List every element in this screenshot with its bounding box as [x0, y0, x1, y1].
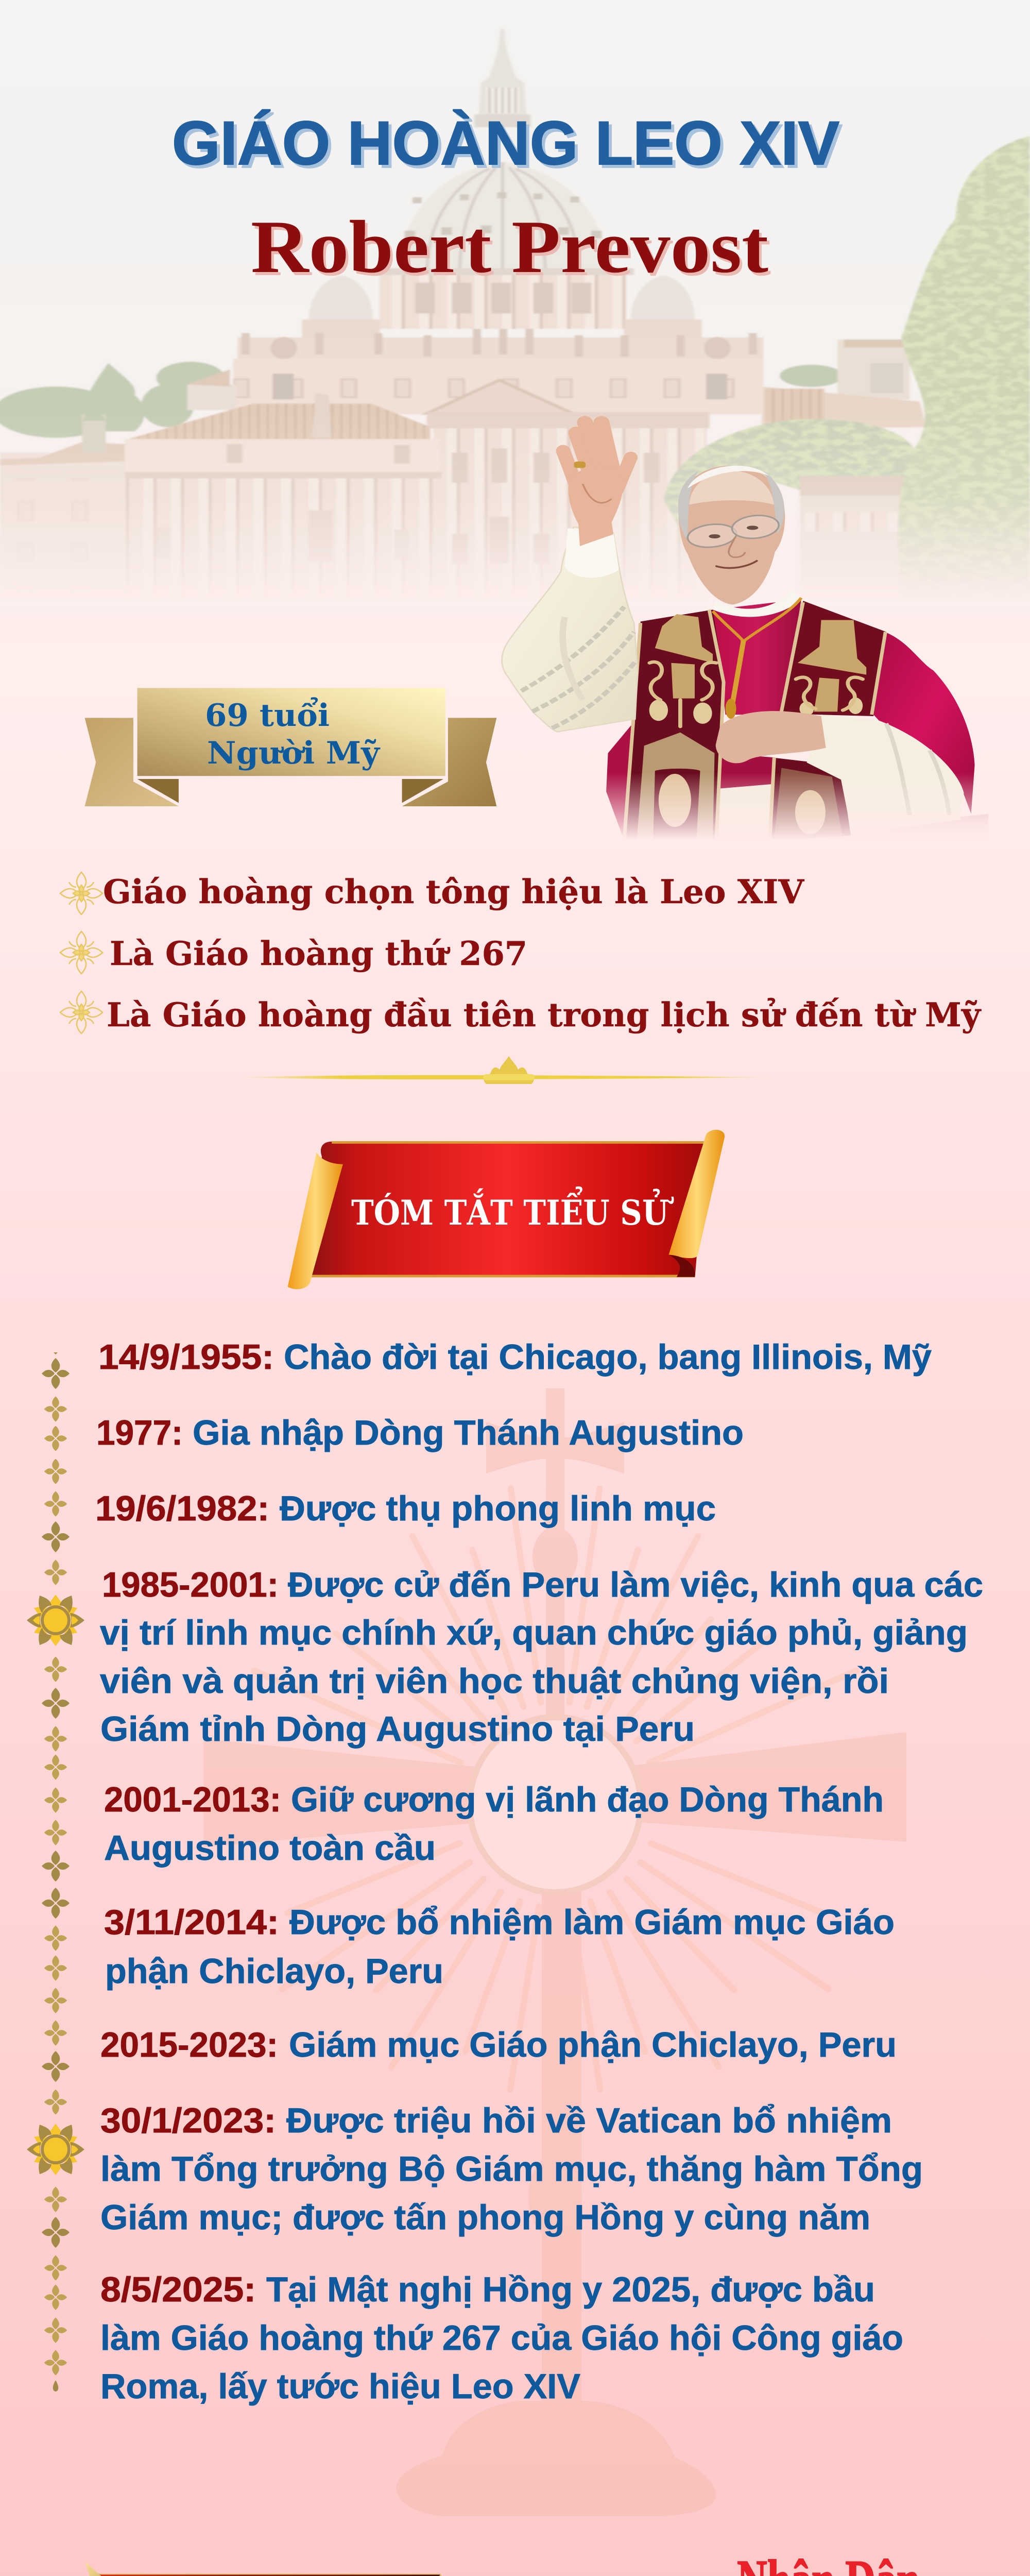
- bullet list: [60, 872, 982, 1035]
- watermark lower stem: [542, 1886, 581, 2411]
- timeline entry 1977: 1977:: [96, 1413, 183, 1452]
- timeline entry 2023: làm Tổng trưởng Bộ Giám mục, thăng hàm Tổng: [100, 2149, 923, 2189]
- timeline entry 2001-2013: Giữ cương vị lãnh đạo Dòng Thánh: [291, 1780, 884, 1819]
- watermark rays: [254, 1488, 856, 2090]
- timeline entry 2025: Tại Mật nghị Hồng y 2025, được bầu: [266, 2270, 875, 2309]
- timeline entry 2025: [100, 2270, 903, 2406]
- footer banner: infographic source: [85, 2562, 473, 2576]
- timeline entry 1982: [95, 1489, 716, 1528]
- scroll red body: [308, 1142, 706, 1277]
- timeline entry 2001-2013: Augustino toàn cầu: [104, 1828, 436, 1868]
- banner right gold fold: [415, 2575, 473, 2576]
- glasses: [686, 513, 781, 550]
- timeline entry 1985-2001: [100, 1565, 983, 1749]
- drum: [380, 274, 626, 329]
- timeline entry 2025: 8/5/2025:: [100, 2270, 256, 2309]
- timeline entry 2025: làm Giáo hoàng thứ 267 của Giáo hội Công giáo: [100, 2318, 903, 2358]
- timeline entry 1985-2001: Giám tỉnh Dòng Augustino tại Peru: [100, 1709, 695, 1749]
- bullet text 2: Là Giáo hoàng thứ 267: [110, 935, 527, 973]
- icon: sun flower 1: [27, 1595, 84, 1646]
- main dome: [400, 161, 608, 276]
- timeline entry 1955: Chào đời tại Chicago, bang Illinois, Mỹ: [284, 1337, 932, 1377]
- central tree and tower: [663, 419, 917, 530]
- banner left gold fold: [85, 2562, 150, 2576]
- left trees: [0, 362, 843, 438]
- timeline entry 2001-2013: [104, 1780, 884, 1868]
- watermark cross top: [486, 1388, 624, 1721]
- icon: gold flower bullet 3: [60, 991, 102, 1033]
- ribbon centre band: [138, 688, 445, 776]
- facade lower columns: [434, 412, 706, 600]
- left palace wing: [128, 403, 430, 440]
- timeline entry 1985-2001: Được cử đến Peru làm việc, kinh qua các: [288, 1565, 983, 1604]
- attic and statues: [238, 337, 763, 361]
- banner body: [98, 2574, 473, 2576]
- watermark centre lens: [470, 1717, 641, 1892]
- hair: [678, 471, 698, 540]
- scroll right roller: [668, 1130, 725, 1258]
- bullet text 1: Giáo hoàng chọn tông hiệu là Leo XIV: [103, 873, 804, 911]
- timeline entry 1982: Được thụ phong linh mục: [280, 1489, 716, 1528]
- ribbon: age and nationality: Người Mỹ: [207, 735, 381, 771]
- timeline entry 2014: [104, 1903, 895, 1991]
- ribbon left tail: [85, 718, 179, 806]
- scroll heading text: TÓM TẮT TIỂU SỬ: [351, 1187, 674, 1233]
- pope portrait: [502, 422, 988, 840]
- timeline entry 2014: phận Chiclayo, Peru: [105, 1952, 443, 1991]
- eyes: [709, 534, 720, 538]
- zucchetto: [688, 466, 769, 488]
- scroll left roller: [288, 1153, 343, 1289]
- right back buildings: [837, 340, 910, 399]
- timeline entry 2015-2023: Giám mục Giáo phận Chiclayo, Peru: [289, 2025, 897, 2064]
- raised hand: [563, 422, 631, 546]
- timeline entry 1982: 19/6/1982:: [95, 1489, 269, 1528]
- timeline entry 2001-2013: 2001-2013:: [104, 1780, 281, 1819]
- nose and mouth: [729, 537, 745, 557]
- cord and tassel: [713, 598, 801, 641]
- icon: gold flower bullet 2: [60, 931, 102, 974]
- title: GIÁO HOÀNG LEO XIV: [172, 109, 839, 178]
- timeline entry 2015-2023: 2015-2023:: [100, 2025, 278, 2064]
- left lower robe: [606, 721, 635, 836]
- main facade upper: [233, 359, 763, 414]
- gold embroidery: [637, 614, 866, 839]
- left white sleeve: [502, 527, 638, 732]
- timeline ornament column: [27, 1352, 84, 2392]
- heading scroll: biography summary: [288, 1130, 725, 1289]
- timeline entry 1985-2001: viên và quản trị viên học thuật chủng viện, rồi: [100, 1662, 889, 1701]
- right stole: [781, 601, 886, 716]
- ribbon text: 69 tuổi: [205, 697, 330, 734]
- timeline entry 1985-2001: vị trí linh mục chính xứ, quan chức giáo phủ, giảng: [100, 1613, 968, 1652]
- watermark arms: [203, 1732, 906, 1847]
- watermark: monstrance: [203, 1388, 906, 2516]
- right white sleeve: [806, 715, 964, 835]
- ribbon right tail: [402, 718, 496, 806]
- icon: gold flower bullet 1: [60, 872, 102, 914]
- lantern: [478, 28, 527, 120]
- timeline entry 1977: Gia nhập Dòng Thánh Augustino: [193, 1413, 744, 1452]
- watermark base: [396, 2401, 716, 2516]
- collar: [713, 589, 801, 617]
- subtitle: Robert Prevost: Robert Prevost: [251, 205, 768, 289]
- right large tree: [898, 136, 1030, 600]
- timeline entry 2023: [100, 2101, 923, 2237]
- timeline entry 2023: Giám mục; được tấn phong Hồng y cùng năm: [100, 2198, 870, 2237]
- side domes: [308, 276, 373, 320]
- ribbon: age and nationality: [85, 688, 496, 806]
- left stole: [624, 609, 724, 840]
- bullet text 3: Là Giáo hoàng đầu tiên trong lịch sử đến từ Mỹ: [107, 996, 982, 1035]
- watermark knob: [533, 1527, 578, 1587]
- folded hand: [716, 711, 826, 763]
- cape: [873, 632, 975, 814]
- timeline entry 2014: Được bổ nhiệm làm Giám mục Giáo: [289, 1903, 895, 1942]
- timeline entry 1955: 14/9/1955:: [98, 1337, 274, 1377]
- balcony bar: [774, 814, 988, 840]
- left cuff: [564, 529, 619, 578]
- ornamental divider: [233, 1056, 782, 1084]
- timeline entry 1985-2001: 1985-2001:: [102, 1565, 279, 1604]
- face: [678, 466, 785, 605]
- timeline entry 2025: Roma, lấy tước hiệu Leo XIV: [100, 2367, 580, 2406]
- timeline entry 2023: 30/1/2023:: [100, 2101, 276, 2140]
- icon: sun flower 2: [27, 2124, 84, 2175]
- timeline entry 2014: 3/11/2014:: [104, 1903, 279, 1942]
- stole gold trim: [624, 602, 885, 839]
- background photo: St Peter's Basilica: [0, 28, 1030, 600]
- timeline entry 2023: Được triệu hồi về Vatican bổ nhiệm: [286, 2101, 892, 2140]
- icon: droplet end: [53, 2380, 58, 2392]
- centre magenta: [713, 599, 801, 715]
